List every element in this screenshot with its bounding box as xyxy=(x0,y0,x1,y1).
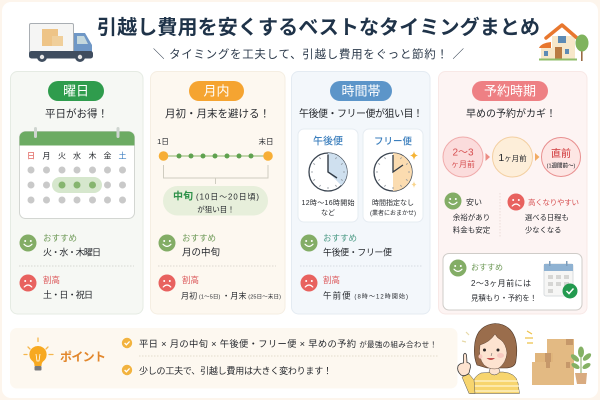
icon: calendar: 金 xyxy=(104,150,112,160)
heading: 早めの予約がカギ: 早めの予約がカギ！ xyxy=(466,107,556,120)
cheap note: 料金も安定 xyxy=(453,224,491,234)
illustration: boxes and plant xyxy=(532,339,592,385)
flow: 予約タイミング: ヶ月前 xyxy=(451,159,475,169)
label: ポイント: ポイント xyxy=(60,350,106,364)
expensive: 午前便 xyxy=(300,274,408,300)
badge: 月内 xyxy=(189,81,244,101)
subtitle: ＼ タイミングを工夫して、引越し費用をぐっと節約！ ／ xyxy=(153,47,464,61)
card: フリー便: 時間指定なし xyxy=(372,198,414,207)
badge: 月内: 月内 xyxy=(203,84,230,98)
recommended: 午後便フリー便 xyxy=(300,233,392,258)
badge: 曜日: 曜日 xyxy=(63,84,89,98)
badge: 曜日 xyxy=(48,81,104,101)
recommendation box: 2〜3ヶ月前には xyxy=(471,278,531,288)
timeline xyxy=(157,136,274,184)
expensive: 土日祝 xyxy=(20,274,93,300)
cheap note: 余裕があり xyxy=(453,212,490,222)
callout: 中旬: 中旬 xyxy=(173,190,193,202)
illustration: woman pointing xyxy=(458,324,533,394)
heading: 月初・月末を避ける: 月初・月末を避ける！ xyxy=(165,107,270,120)
card: フリー便: フリー便 xyxy=(374,136,412,148)
panel: 時間帯 xyxy=(292,72,430,314)
recommended: 火水木 xyxy=(20,233,101,258)
badge: 予約時期: 予約時期 xyxy=(484,84,536,98)
recommended: 月の中旬: おすすめ xyxy=(182,233,216,243)
expensive: 土日祝: 土・日・祝日 xyxy=(43,289,93,300)
badge: 時間帯: 時間帯 xyxy=(341,84,381,98)
icon: calendar: 日 xyxy=(27,152,35,160)
icon: calendar: 月 xyxy=(42,152,50,160)
expensive: 午前便: 割高 xyxy=(323,275,340,285)
card: フリー便: (業者におまかせ) xyxy=(370,209,416,217)
recommendation box xyxy=(443,254,582,310)
recommended: 火水木: 火・水・木曜日 xyxy=(43,246,101,258)
panel: 予約時期 xyxy=(438,72,587,314)
flow: 予約タイミング xyxy=(443,137,580,177)
cheap note xyxy=(444,192,491,234)
recommended: 午後便フリー便: 午後便・フリー便 xyxy=(323,246,392,258)
timeline: 1日 xyxy=(157,137,169,146)
flow: 予約タイミング: 2〜3 xyxy=(452,148,474,158)
callout: 中旬: が狙い目！ xyxy=(197,204,235,214)
recommended: 火水木: おすすめ xyxy=(43,233,77,243)
recommendation box: おすすめ xyxy=(471,263,503,272)
card: 午後便 xyxy=(298,129,358,222)
card: 午後便: 午後便 xyxy=(313,134,343,148)
recommendation box: 見積もり・予約を！ xyxy=(471,292,537,302)
icon: light bulb xyxy=(24,338,53,370)
card: 午後便: 12時〜16時開始 xyxy=(302,198,354,207)
expensive note: 選べる日程も xyxy=(525,213,569,222)
flow: 予約タイミング: 1ヶ月前 xyxy=(498,152,527,164)
expensive note: 高くなりやすい xyxy=(528,197,579,207)
flow: 予約タイミング: (1週間前〜) xyxy=(547,162,576,170)
expensive: 月初月末 xyxy=(158,274,281,300)
title: 引越し費用を安くするベストなタイミングまとめ xyxy=(97,15,540,39)
icon: calendar: 水 xyxy=(73,150,81,160)
badge: 時間帯 xyxy=(330,81,392,101)
card: 午後便: など xyxy=(321,209,335,217)
icon: calendar: 木 xyxy=(88,150,96,160)
card: フリー便 xyxy=(363,129,423,222)
expensive: 月初月末: 月初 (1〜5日) ・月末 (25日〜末日) xyxy=(181,290,281,300)
recommended: 午後便フリー便: おすすめ xyxy=(323,233,357,243)
icon: calendar: 土 xyxy=(118,150,126,160)
heading: 平日がお得: 平日がお得！ xyxy=(45,107,108,120)
callout: 中旬: (10日〜20日頃) xyxy=(196,192,259,202)
recommended: 月の中旬 xyxy=(158,233,220,258)
expensive note: 少なくなる xyxy=(525,226,561,234)
expensive: 午前便: 午前便 (8時〜12時開始) xyxy=(323,290,408,300)
panel: 曜日 xyxy=(10,72,143,314)
icon: house xyxy=(539,25,588,61)
expensive: 土日祝: 割高 xyxy=(43,275,60,285)
tip 2: 少しの工夫で、引越し費用は大きく変わります！ xyxy=(139,365,332,376)
panel: ポイント xyxy=(10,328,458,388)
badge: 予約時期 xyxy=(472,81,548,101)
icon: moving truck xyxy=(29,24,93,62)
panel: 月内 xyxy=(150,72,285,314)
expensive: 月初月末: 割高 xyxy=(182,275,199,285)
icon: calendar: 火 xyxy=(58,152,66,160)
icon: calendar check xyxy=(544,261,578,298)
flow: 予約タイミング: 直前 xyxy=(551,147,571,160)
heading: 午後便フリー便: 午後便・フリー便が狙い目！ xyxy=(299,107,423,120)
recommended: 月の中旬: 月の中旬 xyxy=(182,246,220,258)
expensive note xyxy=(508,194,579,234)
tip 1: 平日 × 月の中旬 × 午後便・フリー便 × 早めの予約 が最強の組み合わせ！ xyxy=(139,338,437,349)
icon: calendar xyxy=(20,127,134,218)
callout: 中旬 xyxy=(163,186,268,216)
cheap note: 安い xyxy=(466,198,482,207)
timeline: 末日 xyxy=(258,136,274,146)
